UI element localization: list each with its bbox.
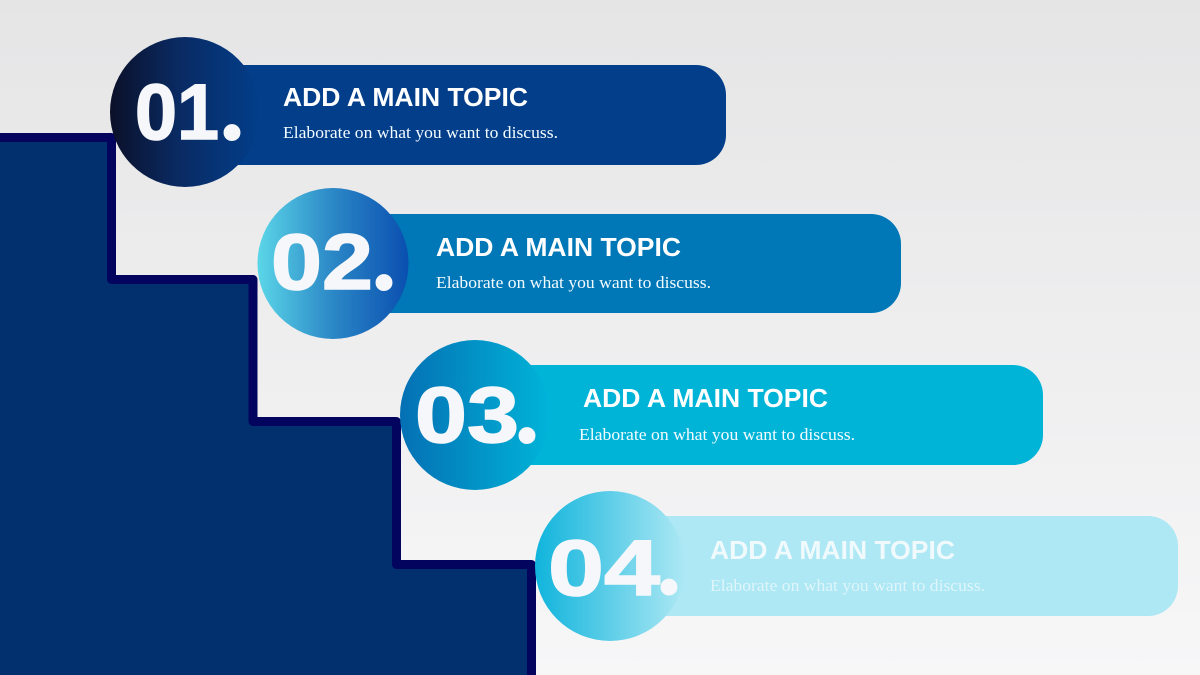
step 3 xyxy=(400,340,1043,490)
description 3: Elaborate on what you want to discuss. xyxy=(579,425,855,444)
number 02 xyxy=(271,198,397,312)
number 03: 03 xyxy=(415,370,519,459)
heading 3: ADD A MAIN TOPIC xyxy=(583,383,828,413)
circle 2 xyxy=(258,188,408,339)
number 04 xyxy=(548,502,682,617)
number 02: 02 xyxy=(271,217,373,306)
description 1: Elaborate on what you want to discuss. xyxy=(283,123,558,142)
description 2: Elaborate on what you want to discuss. xyxy=(436,273,711,292)
number 04: . xyxy=(656,502,682,617)
heading 2: ADD A MAIN TOPIC xyxy=(436,232,681,262)
circle 4 xyxy=(535,491,685,641)
number 01: . xyxy=(219,48,245,162)
circle 1 xyxy=(110,37,260,187)
number 01 xyxy=(135,48,245,162)
bar 1 xyxy=(200,65,726,165)
number 03 xyxy=(415,350,540,466)
bar 2 xyxy=(340,214,901,313)
number 01: 01 xyxy=(135,67,219,156)
step 1 xyxy=(110,37,726,187)
circle 3 xyxy=(400,340,550,490)
bar 3 xyxy=(490,365,1043,465)
number 02: . xyxy=(371,198,397,312)
description 4: Elaborate on what you want to discuss. xyxy=(710,576,985,595)
step 2 xyxy=(258,188,901,339)
number 03: . xyxy=(514,350,540,466)
number 04: 04 xyxy=(548,523,660,612)
heading 4: ADD A MAIN TOPIC xyxy=(710,535,955,565)
staircase shape xyxy=(0,138,532,675)
heading 1: ADD A MAIN TOPIC xyxy=(283,82,528,112)
step 4 xyxy=(535,491,1178,641)
bar 4 xyxy=(625,516,1178,616)
